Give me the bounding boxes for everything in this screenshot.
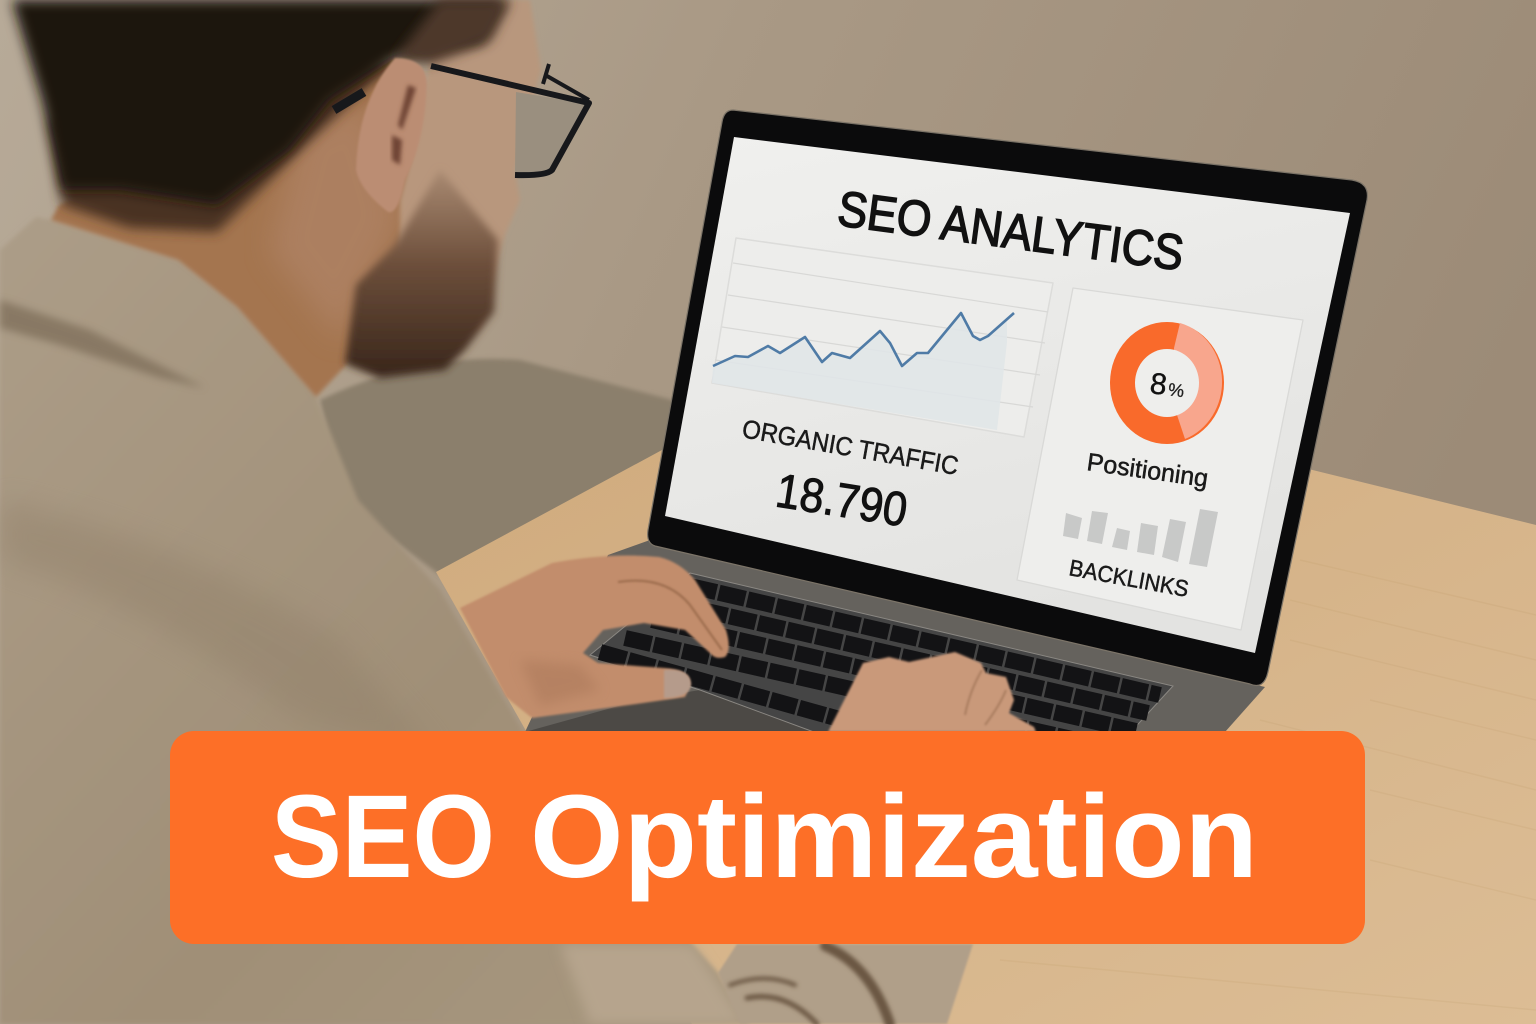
chart area fill	[712, 313, 1007, 430]
face	[400, 0, 541, 330]
beard	[345, 170, 498, 378]
glasses	[334, 64, 589, 175]
backlinks label: BACKLINKS	[1067, 554, 1191, 602]
neck highlight near ear	[270, 100, 400, 340]
sleeve folds	[730, 946, 890, 1024]
banner title word one: SEO	[271, 771, 495, 903]
hair	[12, 0, 506, 205]
chart line	[713, 313, 1014, 366]
laptop	[525, 110, 1367, 748]
shirt sleeve lower	[718, 944, 973, 1024]
neck	[51, 58, 430, 397]
donut chart	[1110, 322, 1224, 444]
positioning and backlinks card	[1017, 288, 1303, 630]
wooden table	[436, 450, 1536, 1024]
banner title word two: Optimization	[530, 771, 1258, 903]
shirt body	[0, 217, 750, 1024]
ear	[356, 58, 427, 212]
orange banner	[170, 731, 1365, 944]
shirt lower highlight	[560, 944, 745, 1024]
hands on keyboard	[460, 555, 1036, 732]
organic traffic value: 18.790	[772, 465, 911, 538]
sideburn fade	[395, 0, 510, 64]
donut value: 8%	[1148, 367, 1187, 404]
laptop base deck	[525, 540, 1265, 732]
shirt fold shading	[0, 500, 440, 760]
laptop screen	[665, 137, 1350, 653]
screen title: SEO ANALYTICS	[835, 180, 1187, 281]
palm shadow	[520, 660, 600, 706]
finger contour	[618, 581, 722, 650]
thumb nail	[664, 670, 691, 698]
inner ear shadow	[392, 85, 416, 165]
lens tint	[515, 92, 588, 174]
background sofa band	[320, 359, 680, 575]
hair fade	[50, 60, 395, 232]
temple and lens frame	[431, 66, 589, 175]
trackpad area shadow	[525, 690, 822, 732]
far temple	[543, 64, 589, 100]
left hand	[460, 555, 729, 718]
backlinks bar chart	[1063, 509, 1218, 567]
right hand	[828, 652, 1036, 732]
organic traffic chart card	[712, 238, 1053, 437]
finger contours	[965, 670, 1006, 725]
shirt collar fold shadow	[0, 300, 205, 388]
laptop lid bezel	[648, 110, 1367, 686]
keyboard	[590, 573, 1173, 748]
positioning label: Positioning	[1085, 448, 1210, 493]
temple behind ear	[334, 92, 364, 110]
organic traffic label: ORGANIC TRAFFIC	[740, 413, 961, 481]
man in shirt, viewed from behind	[0, 0, 973, 1024]
